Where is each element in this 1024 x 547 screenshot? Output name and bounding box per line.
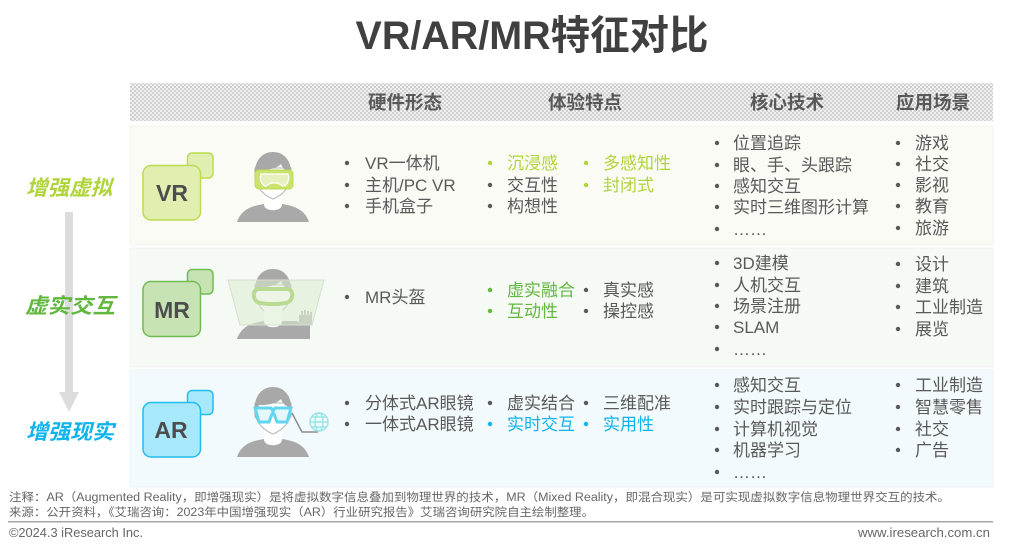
application list [896,134,949,238]
application list: 旅游 [915,219,949,238]
panel: AR row [130,370,993,487]
MR icon badge: MR [154,297,190,323]
core technology list: 眼、手、头跟踪 [733,156,852,175]
footnote: 来源：公开资料，《艾瑞咨询：2023年中国增强现实（AR）行业研究报告》艾瑞咨询研究院自主绘制整理。 [9,505,594,519]
VR icon badge: VR [156,180,188,206]
experience list: 沉浸感 [507,154,558,173]
hardware form list: VR一体机 [365,154,440,173]
progression arrow [59,212,79,412]
footnote [9,490,950,519]
footer: www.iresearch.com.cn [857,526,990,540]
core technology list [715,134,869,239]
experience list [488,281,654,321]
experience list: 交互性 [507,176,558,195]
application list: 智慧零售 [915,398,983,417]
application list: 广告 [915,441,949,460]
core technology list: 3D建模 [733,254,789,273]
panel: VR row [130,126,993,245]
core technology list [715,254,801,359]
icon: person with MR headset and virtual screen [228,269,324,339]
VR icon badge [143,153,213,220]
MR icon badge [143,270,213,336]
experience list: 虚实结合 [507,394,575,413]
hardware form list: 分体式AR眼镜 [365,394,474,413]
AR icon badge [143,390,213,457]
hardware form list: 手机盒子 [365,197,433,216]
footer: ©2024.3 iResearch Inc. [9,526,143,540]
core technology list: …… [733,220,767,239]
side label: 增强现实: 增强现实 [26,420,117,444]
application list: 游戏 [915,134,949,153]
core technology list: 实时跟踪与定位 [733,398,852,417]
core technology list: 计算机视觉 [733,420,818,439]
table header [130,83,993,121]
application list: 建筑 [915,277,949,296]
table header: 体验特点 [548,92,622,113]
core technology list: 人机交互 [733,276,801,295]
side label: 增强虚拟: 增强虚拟 [26,177,115,200]
table header: 核心技术 [750,92,824,113]
experience list: 封闭式 [603,176,654,195]
experience list: 实时交互 [507,415,575,434]
experience list: 虚实融合 [507,281,575,300]
application list: 教育 [915,197,949,216]
application list: 展览 [915,320,949,339]
application list: 社交 [915,420,949,439]
core technology list: 感知交互 [733,376,801,395]
footer [8,521,993,540]
hardware form list: 主机/PC VR [365,176,456,195]
experience list: 真实感 [603,281,654,300]
application list: 影视 [915,176,949,195]
AR icon badge: AR [154,417,188,443]
icon: person with AR glasses and globe [237,387,328,457]
application list: 工业制造 [915,376,983,395]
core technology list: 感知交互 [733,177,801,196]
experience list: 互动性 [507,302,558,321]
side label: 虚实交互: 虚实交互 [25,294,118,318]
application list: 社交 [915,155,949,174]
application list [896,255,983,339]
title: VR/AR/MR特征对比 [356,14,708,58]
experience list [488,394,671,434]
hardware form list [345,394,474,434]
experience list: 构想性 [507,197,558,216]
core technology list: 场景注册 [733,297,801,316]
panel: MR row [130,248,993,367]
core technology list: …… [733,340,767,359]
experience list: 实用性 [603,415,654,434]
experience list: 操控感 [603,302,654,321]
footnote: 注释：AR（Augmented Reality，即增强现实）是将虚拟数字信息叠加到物理世界的技术，MR（Mixed Reality，即混合现实）是可实现虚拟数字信息物理世界交互的技术。 [9,490,950,504]
experience list [488,154,671,216]
table header: 硬件形态 [368,92,442,113]
hardware form list [345,154,456,216]
table header: 应用场景 [896,92,970,113]
core technology list [715,376,852,482]
application list: 设计 [915,255,949,274]
experience list: 三维配准 [603,394,671,413]
core technology list: 位置追踪 [733,134,801,153]
application list [896,376,983,460]
core technology list: 实时三维图形计算 [733,198,869,217]
experience list: 多感知性 [603,154,671,173]
application list: 工业制造 [915,298,983,317]
core technology list: 机器学习 [733,441,801,460]
core technology list: SLAM [733,318,779,337]
core technology list: …… [733,463,767,482]
icon: person wearing VR goggles [237,152,309,222]
hardware form list: MR头盔 [365,288,425,307]
hardware form list: 一体式AR眼镜 [365,415,474,434]
